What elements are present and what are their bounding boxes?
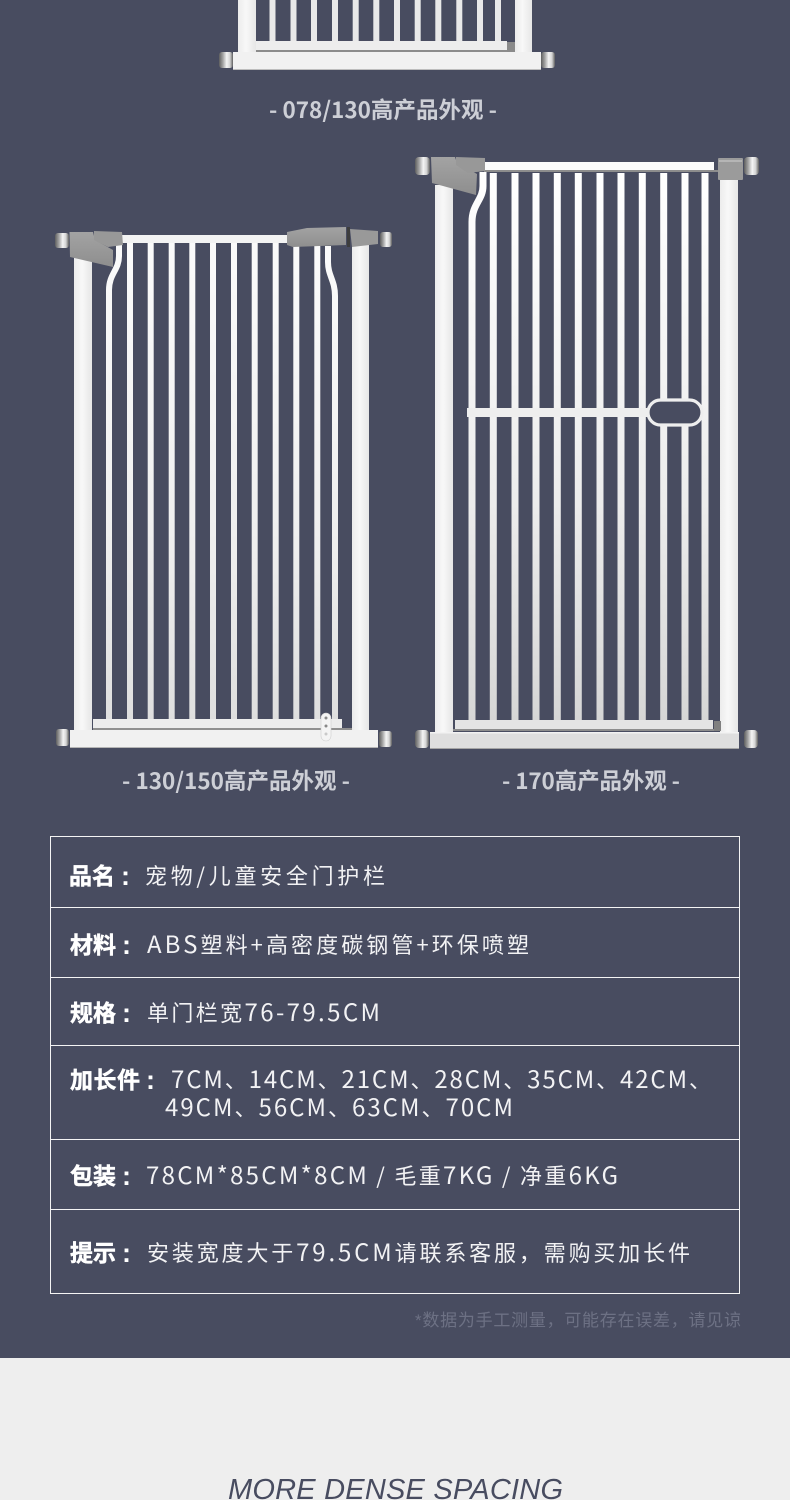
left clamp — [70, 232, 113, 267]
vertical bars — [493, 173, 705, 722]
cross rail — [467, 408, 649, 417]
row: product name: 宠物/儿童安全门护栏 — [145, 859, 385, 891]
row: packaging: : — [122, 1161, 131, 1191]
base bar — [430, 732, 739, 749]
row: tip: 提示 — [70, 1234, 116, 1268]
row: extensions: 加长件 — [70, 1061, 140, 1095]
row: packaging: 78CM*85CM*8CM / 毛重7KG / 净重6KG — [146, 1156, 618, 1191]
row: product name: 品名 — [69, 857, 115, 891]
light bottom section — [0, 1358, 790, 1500]
caption: 170: - 170高产品外观 - — [502, 764, 680, 796]
bent gate bar — [472, 172, 483, 722]
top rail — [120, 235, 290, 243]
posts — [435, 185, 453, 734]
row: packaging: 包装 — [70, 1157, 116, 1191]
latch plate — [321, 713, 331, 741]
row: specification: 单门栏宽76-79.5CM — [147, 993, 380, 1028]
spec table — [50, 836, 740, 1294]
posts — [74, 250, 92, 732]
row: extensions: : — [146, 1065, 155, 1095]
lower rail — [455, 720, 713, 729]
row: material: : — [122, 930, 131, 960]
row: extensions — [70, 1060, 711, 1123]
left clamp — [431, 157, 477, 195]
oval handle — [648, 400, 702, 425]
top rail — [484, 162, 714, 170]
row: extensions: 7CM、14CM、21CM、28CM、35CM、42CM、 — [171, 1060, 711, 1095]
product: 130/150 gate — [55, 227, 392, 748]
product: 078/130 gate (cropped top) — [219, 0, 555, 70]
base bar — [70, 730, 378, 748]
row: specification: 规格 — [70, 994, 116, 1028]
row: product name: : — [121, 861, 130, 891]
row: tip: : — [122, 1238, 131, 1268]
footnote: *数据为手工测量，可能存在误差，请见谅 — [415, 1311, 741, 1330]
row: tip: 安装宽度大于79.5CM请联系客服，需购买加长件 — [147, 1233, 690, 1268]
knobs — [415, 157, 430, 175]
right clamp — [718, 158, 743, 180]
vertical bars — [130, 243, 317, 720]
lower rail — [93, 719, 342, 728]
row: material: 材料 — [70, 926, 116, 960]
product: 170 gate — [415, 157, 759, 749]
caption: 078/130: - 078/130高产品外观 - — [269, 93, 497, 125]
bent gate bars — [109, 244, 335, 720]
right handle — [287, 227, 346, 247]
caption: 130/150: - 130/150高产品外观 - — [122, 764, 350, 796]
knobs — [55, 233, 69, 248]
row: extensions: 49CM、56CM、63CM、70CM — [165, 1088, 513, 1123]
row: material: ABS塑料+高密度碳钢管+环保喷塑 — [147, 925, 529, 960]
row: specification: : — [122, 998, 131, 1028]
